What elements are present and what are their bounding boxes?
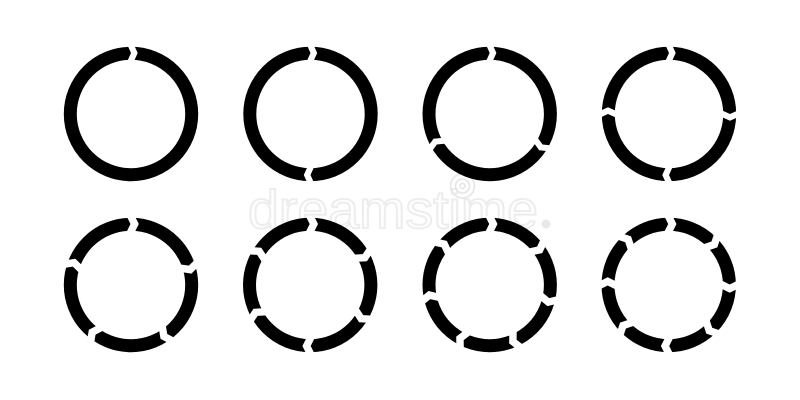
ring: 5 segments (64, 216, 199, 346)
ring: 8 segments (600, 216, 738, 354)
watermark registered mark (542, 220, 550, 228)
watermark (248, 174, 550, 240)
watermark wordmark: dreamstime (248, 180, 538, 240)
ring: 1 segment (70, 45, 192, 175)
ring: 6 segments (247, 216, 374, 354)
ring: 2 segments (250, 45, 371, 183)
watermark spiral icon (450, 174, 474, 198)
ring: 4 segments (600, 45, 738, 183)
ring: 3 segments (427, 45, 551, 175)
ring: 7 segments (421, 216, 558, 351)
